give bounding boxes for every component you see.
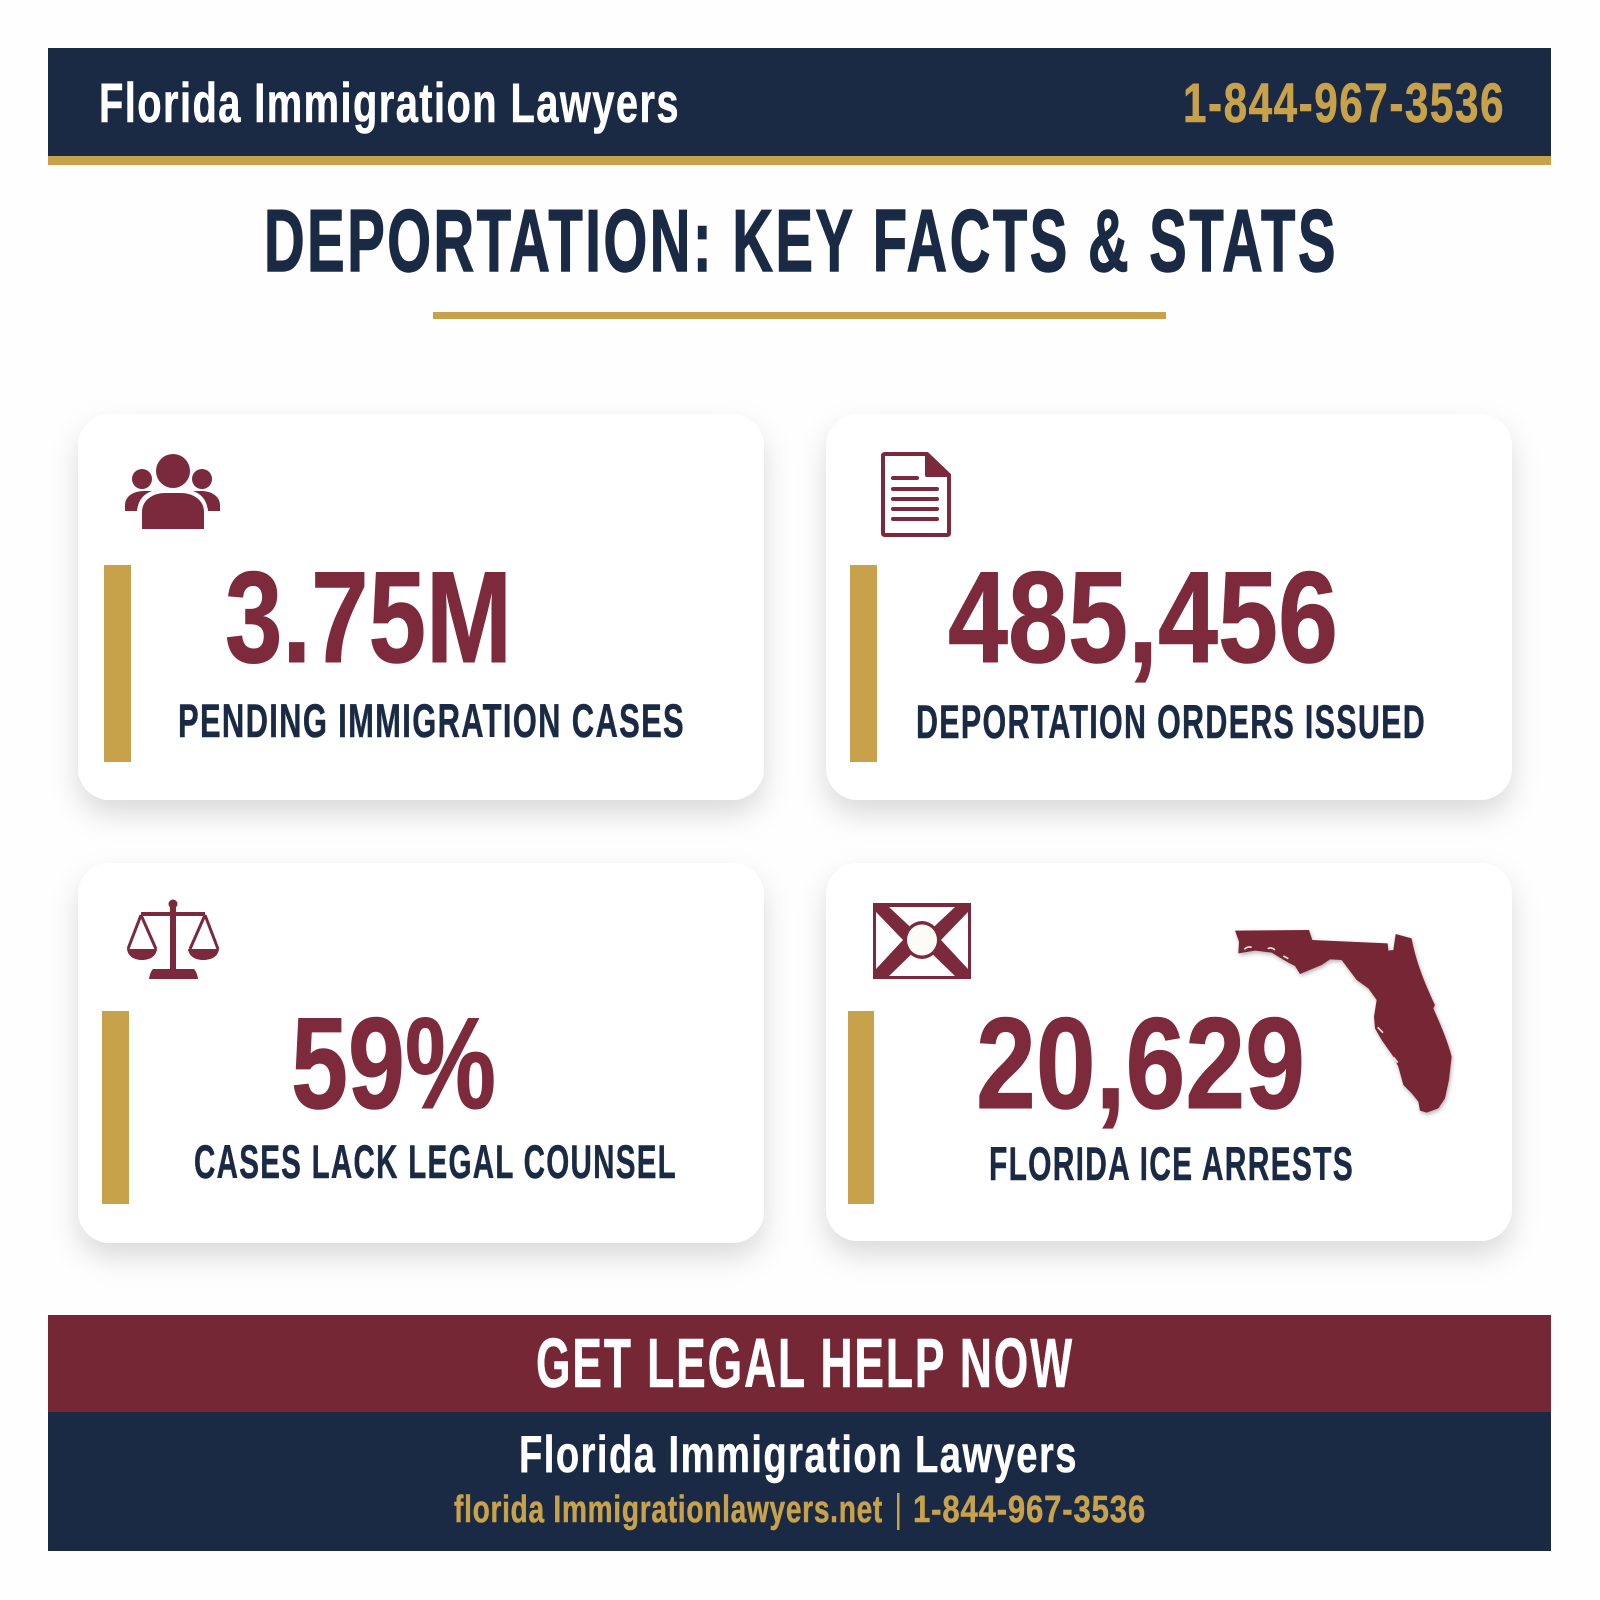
- stat number: 3.75M: [225, 544, 512, 690]
- stat number: 59%: [291, 990, 496, 1136]
- header band: [48, 48, 1551, 165]
- icon: florida flag: [873, 903, 971, 979]
- footer phone: 1-844-967-3536: [913, 1489, 1146, 1531]
- phone number: 1-844-967-3536: [1183, 71, 1505, 134]
- panel: florida ice arrests: [826, 863, 1512, 1241]
- panel: deportation orders: [826, 414, 1512, 800]
- panel: pending immigration cases: [78, 414, 764, 800]
- stat number: 20,629: [976, 990, 1305, 1136]
- stat label: FLORIDA ICE ARRESTS: [989, 1137, 1354, 1190]
- firm name: Florida Immigration Lawyers: [99, 71, 680, 134]
- icon: people: [125, 454, 220, 529]
- icon: florida map: [1235, 930, 1452, 1113]
- footer band: [48, 1412, 1551, 1551]
- icon: document: [883, 454, 949, 535]
- stat label: PENDING IMMIGRATION CASES: [178, 694, 685, 747]
- icon: scales: [127, 900, 219, 979]
- footer website: florida Immigrationlawyers.net: [454, 1489, 883, 1531]
- panel: lack legal counsel: [78, 863, 764, 1243]
- footer firm name: Florida Immigration Lawyers: [519, 1426, 1078, 1484]
- call to action band: [48, 1315, 1551, 1412]
- stat number: 485,456: [948, 544, 1338, 690]
- footer separator: [897, 1493, 900, 1530]
- stat label: CASES LACK LEGAL COUNSEL: [194, 1135, 677, 1188]
- call to action band: GET LEGAL HELP NOW: [536, 1324, 1074, 1402]
